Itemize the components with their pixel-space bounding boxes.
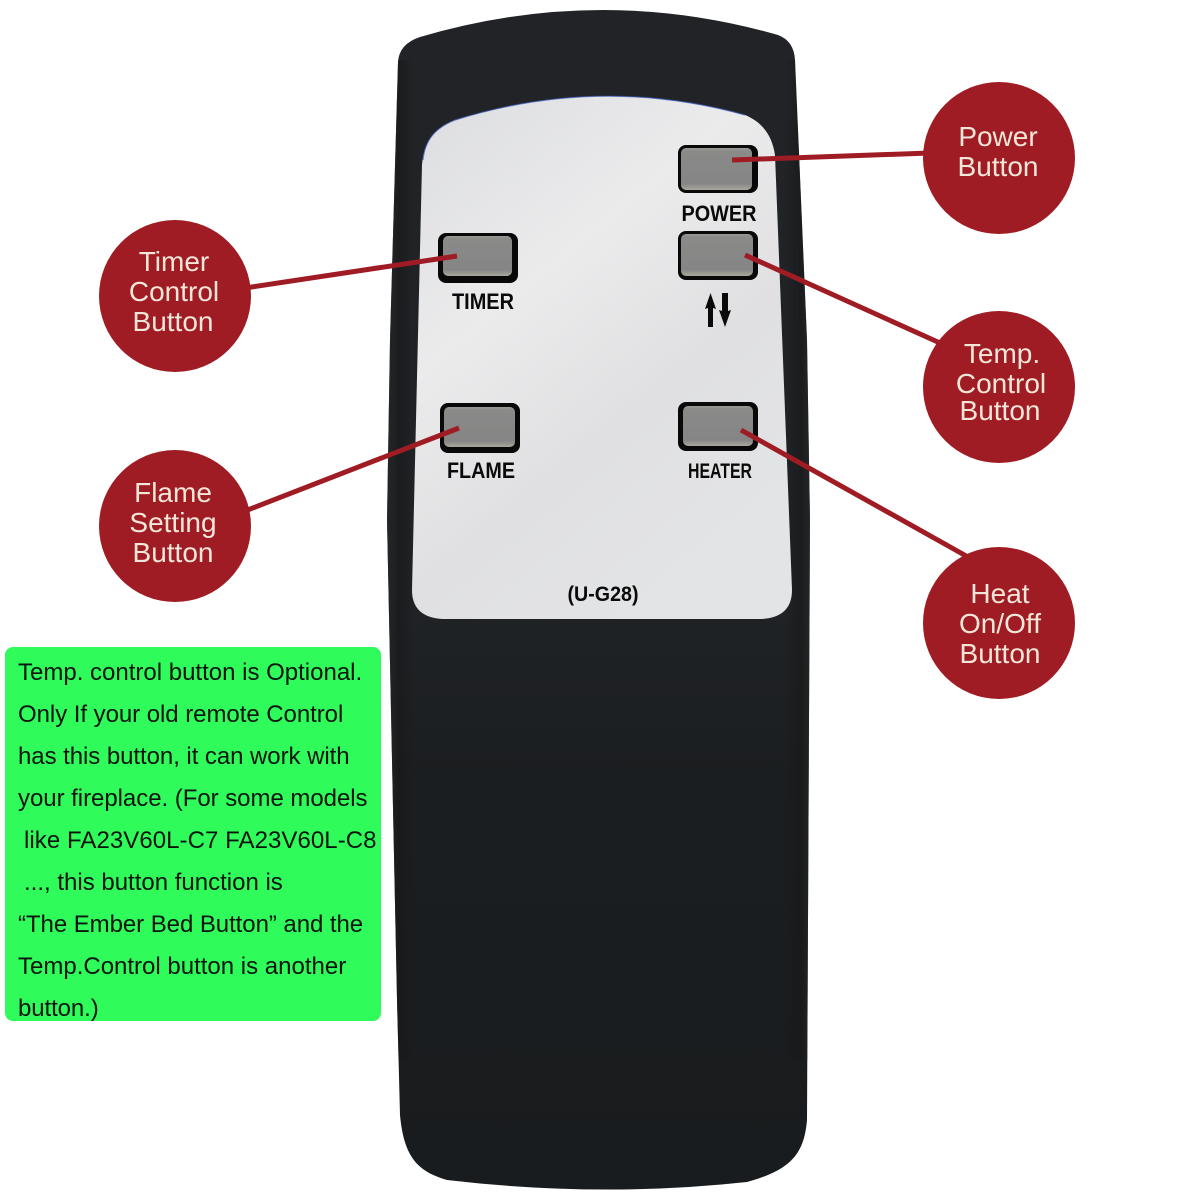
button: power <box>678 145 758 193</box>
callout: temp control button <box>923 311 1075 463</box>
label plate <box>412 96 792 619</box>
remote control illustration with callouts <box>99 10 1075 1190</box>
callout: power button: Button <box>958 151 1038 182</box>
green note panel: ..., this button function is <box>24 869 283 896</box>
callout: flame setting button: Button <box>133 537 213 568</box>
remote body <box>385 10 812 1190</box>
callout: temp control button: Control <box>956 368 1046 399</box>
callout: timer control button: Timer <box>139 246 209 277</box>
callout: temp control button: Button <box>960 395 1040 426</box>
callout: heat on/off button: Button <box>960 638 1040 669</box>
connector lines <box>245 153 968 557</box>
button: temp <box>678 231 758 280</box>
green note panel: has this button, it can work with <box>18 743 350 770</box>
button labels <box>447 201 757 606</box>
green note panel: Temp.Control button is another <box>18 953 346 980</box>
green note panel: button.) <box>18 995 99 1022</box>
callout: flame setting button: Setting <box>129 507 217 538</box>
callout: heat on/off button: On/Off <box>959 608 1041 639</box>
button labels: TIMER <box>452 289 514 314</box>
button labels: HEATER <box>688 460 752 483</box>
callout: power button: Power <box>958 121 1038 152</box>
callout: heat on/off button: Heat <box>970 578 1030 609</box>
button labels: (U-G28) <box>568 583 638 606</box>
green note panel: your fireplace. (For some models <box>18 785 368 812</box>
green note panel: “The Ember Bed Button” and the <box>18 911 363 938</box>
green note panel <box>5 647 381 1021</box>
callout: timer control button: Button <box>133 306 213 337</box>
callout: timer control button: Control <box>129 276 219 307</box>
button: flame <box>440 403 520 453</box>
green note panel: like FA23V60L-C7 FA23V60L-C8 <box>24 827 377 854</box>
callout: flame setting button <box>99 450 251 602</box>
green note panel: Temp. control button is Optional. <box>18 659 362 686</box>
button labels: FLAME <box>447 458 515 483</box>
button: timer <box>438 233 518 283</box>
icon: up and down arrows <box>705 293 731 327</box>
callout: temp control button: Temp. <box>964 338 1040 369</box>
button: heater <box>678 402 758 451</box>
green note panel: Only If your old remote Control <box>18 701 343 728</box>
callout: timer control button <box>99 220 251 372</box>
button labels: POWER <box>682 201 757 226</box>
callout: heat on/off button <box>923 547 1075 699</box>
callout: power button <box>923 82 1075 234</box>
callout: flame setting button: Flame <box>134 477 212 508</box>
